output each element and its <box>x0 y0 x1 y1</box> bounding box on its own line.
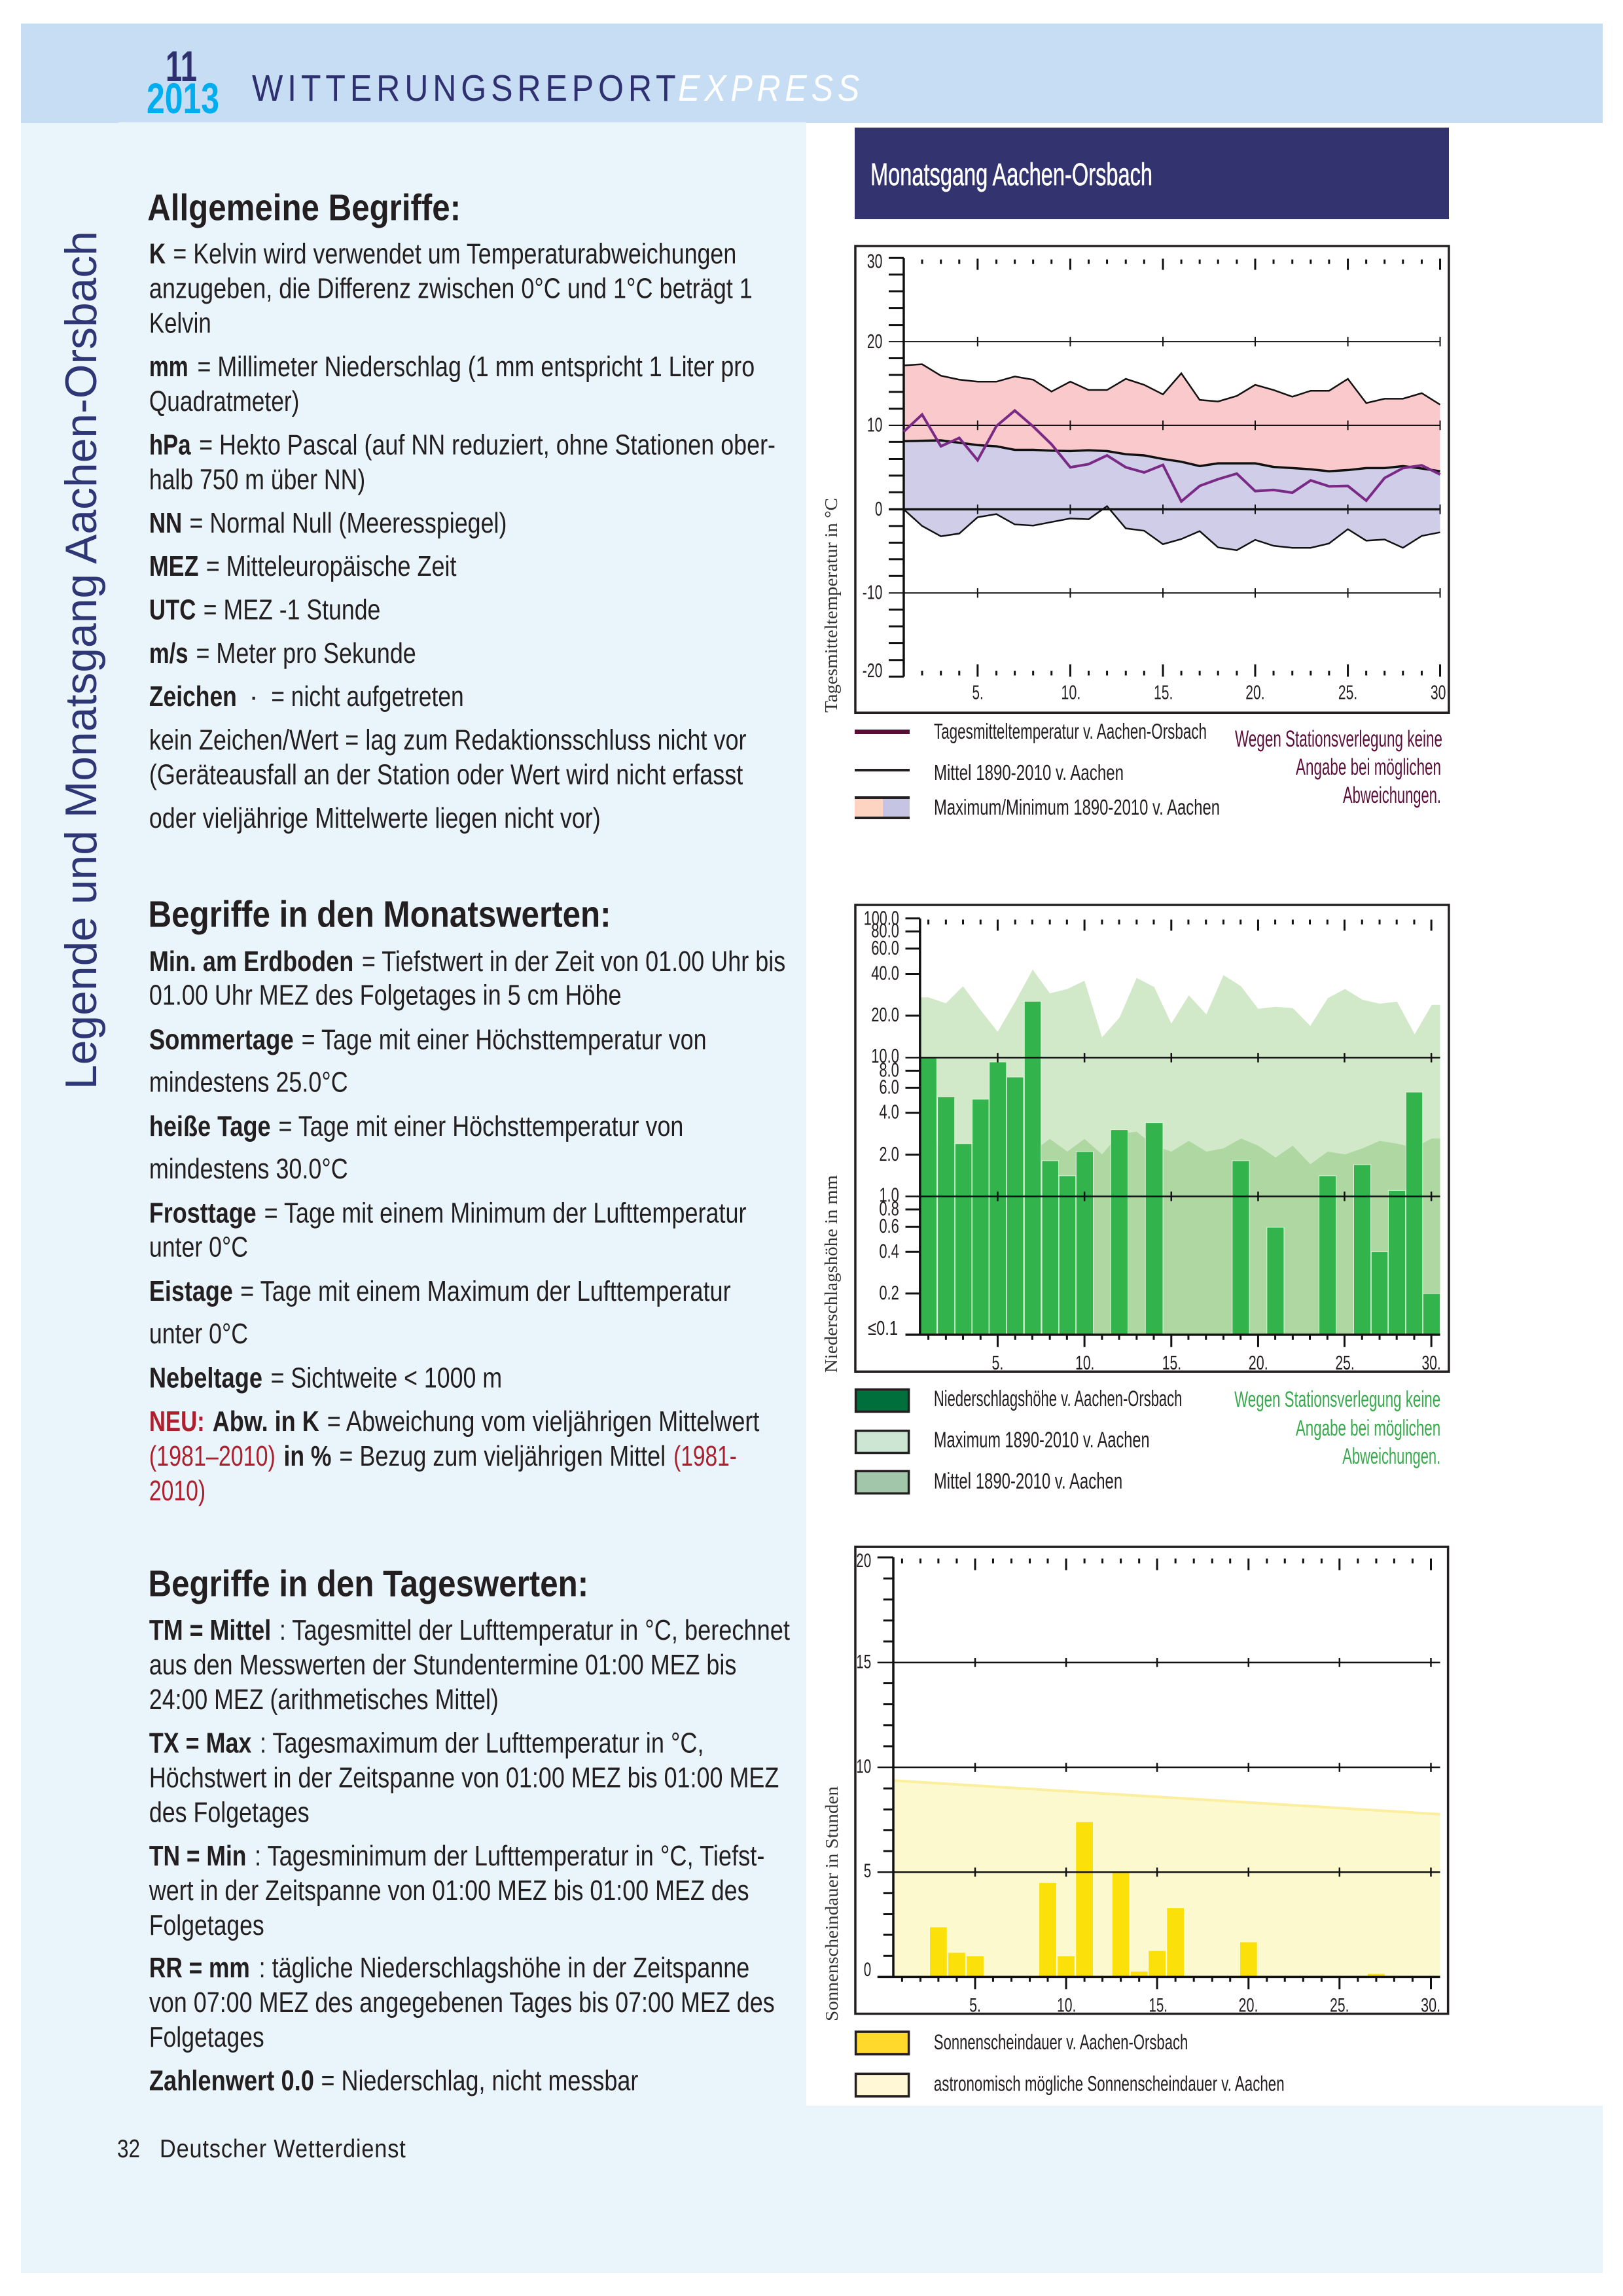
y axis labels: 0.4 <box>879 1240 899 1262</box>
legend item: astronomically possible: astronomisch mögliche Sonnenscheindauer v. Aachen <box>934 2072 1285 2096</box>
y axis labels: 0.8 <box>879 1197 899 1220</box>
legend item: max min swatch <box>855 795 1220 819</box>
definition: Nebeltage <box>149 1362 502 1394</box>
y axis labels: ≤0.1 <box>868 1317 898 1339</box>
definition: K: Kelvin <box>149 308 211 340</box>
definition: UTC <box>149 594 380 626</box>
definition: UTC: = MEZ -1 Stunde <box>204 594 380 626</box>
header title: WITTERUNGSREPORT <box>252 67 676 109</box>
legend item: maximum: Maximum 1890-2010 v. Aachen <box>934 1428 1150 1453</box>
header title <box>252 67 859 109</box>
grid lines <box>889 337 1440 598</box>
definition: hPa <box>149 429 776 496</box>
x axis labels: 20. <box>1245 681 1265 704</box>
definition: Zeichen <box>149 680 464 713</box>
x axis labels: 15. <box>1149 1994 1168 2016</box>
definition: MEZ <box>149 550 456 582</box>
definition: Zeichen: Zeichen <box>149 680 237 713</box>
definition: mm: = Millimeter Niederschlag (1 mm entspricht 1 Liter pro <box>197 351 755 383</box>
axis ticks <box>906 919 1431 1347</box>
x axis labels: 25. <box>1330 1994 1349 2016</box>
y axis labels: 100.0 <box>864 907 899 929</box>
axis ticks <box>889 258 1440 677</box>
definition: RR: von 07:00 MEZ des angegebenen Tages bis 07:00 MEZ des <box>149 1987 775 2019</box>
y axis labels: 10 <box>867 414 882 436</box>
line: minimum <box>904 506 1440 550</box>
legend item: sunshine duration <box>856 2031 1188 2055</box>
definition: TM: aus den Messwerten der Stundentermine 01:00 MEZ bis <box>149 1649 736 1681</box>
definition: kein Zeichen: oder vieljährige Mittelwerte liegen nicht vor) <box>149 802 601 834</box>
definition: NEU Abweichung: = Abweichung vom vieljährigen Mittelwert <box>327 1405 759 1438</box>
definition: hPa: = Hekto Pascal (auf NN reduziert, ohne Stationen ober- <box>199 429 776 461</box>
definition: Min. am Erdboden: = Tiefstwert in der Zeit von 01.00 Uhr bis <box>362 945 785 978</box>
definition: Sommertage: Sommertage <box>149 1023 294 1055</box>
grid lines <box>878 1658 1440 1877</box>
definition: NEU Abweichung: NEU: <box>149 1405 205 1438</box>
note: station relocation, green: Angabe bei möglichen <box>1296 1416 1440 1441</box>
definition: heiße Tage: heiße Tage <box>149 1110 271 1142</box>
legend item: precipitation: Niederschlagshöhe v. Aachen-Orsbach <box>934 1386 1182 1411</box>
definition: K: anzugeben, die Differenz zwischen 0°C und 1°C beträgt 1 <box>149 273 753 305</box>
y axis labels: 20 <box>856 1549 871 1572</box>
legend item: daily mean line: Tagesmitteltemperatur v. Aachen-Orsbach <box>934 719 1207 743</box>
legend item: astronomically possible <box>856 2072 1285 2096</box>
area mask below minimum <box>904 506 1440 587</box>
definition: Frosttage: unter 0°C <box>149 1231 248 1263</box>
axis ticks <box>878 1557 1431 1989</box>
issue number and year: 11 <box>166 42 197 90</box>
note: station relocation, green: Abweichungen. <box>1342 1444 1440 1469</box>
definition: Zahlenwert <box>149 2064 638 2096</box>
chart: precipitation <box>855 905 1449 1494</box>
x axis labels: 5. <box>969 1994 981 2016</box>
issue number and year: 2013 <box>147 74 219 122</box>
definition: Sommertage: mindestens 25.0°C <box>149 1066 348 1098</box>
definition: hPa: halb 750 m über NN) <box>149 464 365 496</box>
definition: heiße Tage: mindestens 30.0°C <box>149 1153 348 1185</box>
y axis labels: 0.2 <box>879 1282 899 1304</box>
definition: TN: TN = Min <box>149 1840 246 1872</box>
y axis labels: 20 <box>867 330 882 353</box>
definition: Min. am Erdboden: Min. am Erdboden <box>149 945 353 978</box>
heading: Begriffe in den Monatswerten: <box>149 893 611 934</box>
y axis labels <box>864 907 899 1339</box>
note: station relocation, purple: Angabe bei möglichen <box>1296 754 1441 780</box>
definition: TM: TM = Mittel <box>149 1614 271 1646</box>
definition: m/s: m/s <box>149 637 188 669</box>
definition: mm: Quadratmeter) <box>149 385 299 417</box>
definition: MEZ: MEZ <box>149 550 198 582</box>
x axis labels: 10. <box>1075 1352 1094 1374</box>
definition: Eistage: unter 0°C <box>149 1318 248 1350</box>
y axis labels: 15 <box>856 1650 871 1672</box>
x axis labels: 10. <box>1057 1994 1076 2016</box>
legend item: mean <box>856 1469 1122 1494</box>
definition: Zeichen: = nicht aufgetreten <box>271 680 464 713</box>
chart frame <box>855 1547 1448 2014</box>
definition: NEU Abweichung: (1981–2010) <box>149 1440 276 1472</box>
line: astronomically possible upper edge <box>893 1780 1440 1814</box>
area: minimum range <box>904 440 1440 567</box>
note: station relocation, purple: Abweichungen. <box>1343 783 1441 808</box>
definition: m/s <box>149 637 416 669</box>
chart: sunshine duration <box>855 1547 1448 2096</box>
definition: kein Zeichen: kein Zeichen/Wert = lag zum Redaktionsschluss nicht vor <box>149 724 747 756</box>
footer: page number and publisher: 32 <box>117 2135 140 2163</box>
y axis labels: 80.0 <box>871 919 899 942</box>
y axis labels: 1.0 <box>879 1184 899 1206</box>
definition: K <box>149 238 753 340</box>
issue number and year <box>147 42 219 122</box>
definition: NN: NN <box>149 507 182 539</box>
definition: NEU Abweichung: 2010) <box>149 1475 205 1507</box>
chart frame <box>855 246 1449 713</box>
panel title: Monatsgang Aachen-Orsbach <box>855 128 1449 219</box>
legend item: maximum <box>856 1428 1150 1453</box>
definition: TM <box>149 1614 790 1716</box>
y axis labels: 30 <box>867 250 882 272</box>
legend item: max min swatch: Maximum/Minimum 1890-2010 v. Aachen <box>934 795 1220 819</box>
y axis title: precipitation: Niederschlagshöhe in mm <box>821 1175 841 1373</box>
panel title: Monatsgang Aachen-Orsbach: Monatsgang Aachen-Orsbach <box>870 158 1152 192</box>
line: maximum <box>904 364 1440 404</box>
line: daily mean temperature Aachen-Orsbach <box>904 411 1440 501</box>
x axis labels: 15. <box>1154 681 1173 704</box>
definition: TN <box>149 1840 764 1941</box>
bars: precipitation Aachen-Orsbach <box>920 1001 1440 1334</box>
definition: Zahlenwert: Zahlenwert 0.0 <box>149 2064 314 2096</box>
definition: MEZ: = Mitteleuropäische Zeit <box>206 550 456 582</box>
definition: Min. am Erdboden <box>149 945 785 1012</box>
y axis title: sunshine: Sonnenscheindauer in Stunden <box>822 1786 842 2021</box>
y axis title: temperature: Tagesmitteltemperatur in °C <box>821 498 841 713</box>
legend item: precipitation <box>856 1386 1182 1411</box>
definition: RR: RR = mm <box>149 1952 250 1984</box>
definition: Eistage <box>149 1275 731 1350</box>
header title: EXPRESS <box>678 67 859 109</box>
axes <box>906 919 1440 1335</box>
x axis labels <box>972 681 1446 704</box>
y axis labels: 10 <box>856 1755 871 1777</box>
definition: Sommertage: = Tage mit einer Höchsttemperatur von <box>302 1023 707 1055</box>
legend item: mean line: Mittel 1890-2010 v. Aachen <box>934 760 1124 785</box>
area: maximum range <box>904 364 1440 567</box>
definition: Zahlenwert: = Niederschlag, nicht messbar <box>321 2064 638 2096</box>
definition: kein Zeichen <box>149 724 747 834</box>
x axis labels: 25. <box>1335 1352 1355 1374</box>
x axis labels: 20. <box>1249 1352 1268 1374</box>
y axis line <box>902 258 905 677</box>
definition: TN: : Tagesminimum der Lufttemperatur in °C, Tiefst- <box>255 1840 764 1872</box>
y axis labels: 8.0 <box>879 1059 899 1081</box>
x axis labels: 30. <box>1421 1352 1441 1374</box>
definition: NEU Abweichung: (1981- <box>673 1440 737 1472</box>
y axis labels: 40.0 <box>871 962 899 984</box>
zero line <box>889 508 1440 510</box>
x axis labels: 5. <box>992 1352 1003 1374</box>
definition: Frosttage: Frosttage <box>149 1197 257 1229</box>
vertical page title: Legende und Monatsgang Aachen-Orsbach <box>56 231 106 1089</box>
definition: Frosttage: = Tage mit einem Minimum der Lufttemperatur <box>264 1197 747 1229</box>
definition: K: = Kelvin wird verwendet um Temperaturabweichungen <box>173 238 736 270</box>
y axis labels: 20.0 <box>871 1004 899 1026</box>
definition: TX <box>149 1727 779 1829</box>
left text panel top edge <box>118 122 806 124</box>
y axis labels: -20 <box>863 659 882 682</box>
definition: NEU Abweichung: = Bezug zum vieljährigen Mittel <box>339 1440 666 1472</box>
section: Allgemeine Begriffe <box>147 186 776 834</box>
definition: TN: Folgetages <box>149 1909 264 1941</box>
y axis labels: 0 <box>864 1958 871 1981</box>
chart frame <box>855 905 1449 1371</box>
area: mean 1890-2010 <box>920 1132 1440 1335</box>
definition: TM: : Tagesmittel der Lufttemperatur in °C, berechnet <box>279 1614 790 1646</box>
header band <box>21 24 1603 123</box>
definition: TX: : Tagesmaximum der Lufttemperatur in °C, <box>260 1727 704 1759</box>
definition: RR: : tägliche Niederschlagshöhe in der Zeitspanne <box>259 1952 749 1984</box>
legend item: daily mean line <box>855 719 1207 743</box>
note: station relocation, green <box>1234 1387 1440 1469</box>
area: maximum 1890-2010 <box>920 970 1440 1335</box>
area: astronomically possible sunshine <box>893 1780 1440 1977</box>
x axis labels: 30. <box>1421 1994 1440 2016</box>
x axis labels: 20. <box>1238 1994 1258 2016</box>
legend: sunshine chart <box>856 2031 1285 2096</box>
definition: UTC: UTC <box>149 594 196 626</box>
definition: Nebeltage: = Sichtweite < 1000 m <box>271 1362 502 1394</box>
definition: RR <box>149 1952 775 2053</box>
definition: Frosttage <box>149 1197 747 1263</box>
definition: TM: 24:00 MEZ (arithmetisches Mittel) <box>149 1684 499 1716</box>
line: mean 1890-2010 <box>904 440 1440 471</box>
definition: mm: mm <box>149 351 188 383</box>
definition: heiße Tage <box>149 1110 683 1185</box>
y axis labels: 10.0 <box>871 1045 899 1067</box>
bars: sunshine duration Aachen-Orsbach <box>929 1822 1385 1977</box>
grid lines <box>906 1053 1440 1201</box>
definition: Eistage: = Tage mit einem Maximum der Lufttemperatur <box>240 1275 731 1307</box>
definition: TX: Höchstwert in der Zeitspanne von 01:00 MEZ bis 01:00 MEZ <box>149 1761 779 1793</box>
definition: NEU Abweichung: Abw. in K <box>213 1405 319 1438</box>
x axis labels: 15. <box>1162 1352 1181 1374</box>
y axis labels <box>856 1549 871 1981</box>
definition: hPa: hPa <box>149 429 191 461</box>
note: station relocation, purple <box>1235 726 1442 808</box>
legend item: mean line <box>855 760 1124 785</box>
legend: temperature chart <box>855 719 1442 819</box>
y axis labels: -10 <box>863 581 882 603</box>
x axis labels <box>992 1352 1441 1374</box>
definition: RR: Folgetages <box>149 2021 264 2053</box>
definition: NEU Abweichung: in % <box>283 1440 331 1472</box>
definition: Nebeltage: Nebeltage <box>149 1362 262 1394</box>
note: station relocation, purple: Wegen Stationsverlegung keine <box>1235 726 1442 752</box>
footer: page number and publisher: Deutscher Wetterdienst <box>160 2134 406 2163</box>
x axis labels: 5. <box>972 681 984 704</box>
definition: Sommertage <box>149 1023 707 1098</box>
definition: kein Zeichen: (Geräteausfall an der Station oder Wert wird nicht erfasst <box>149 759 743 791</box>
y axis labels: 0.6 <box>879 1215 899 1237</box>
definition: heiße Tage: = Tage mit einer Höchsttemperatur von <box>279 1110 683 1142</box>
x axis labels: 25. <box>1338 681 1357 704</box>
section: Begriffe in den Monatswerten <box>149 893 785 1507</box>
definition: NN: = Normal Null (Meeresspiegel) <box>190 507 507 539</box>
y axis labels: 2.0 <box>879 1143 899 1165</box>
definition: TN: wert in der Zeitspanne von 01:00 MEZ bis 01:00 MEZ des <box>149 1875 749 1907</box>
section: Begriffe in den Tageswerten <box>149 1563 790 2096</box>
definition: m/s: = Meter pro Sekunde <box>196 637 416 669</box>
definition: Eistage: Eistage <box>149 1275 233 1307</box>
heading: Allgemeine Begriffe: <box>147 186 461 228</box>
chart: daily mean temperature <box>855 246 1449 713</box>
x axis labels: 10. <box>1061 681 1080 704</box>
axes <box>878 1557 1440 1977</box>
note: station relocation, green: Wegen Stationsverlegung keine <box>1234 1387 1440 1412</box>
legend: precipitation chart <box>856 1386 1440 1494</box>
y axis labels: 6.0 <box>879 1076 899 1098</box>
y axis labels: 60.0 <box>871 937 899 959</box>
definition: mm <box>149 351 755 417</box>
legend item: mean: Mittel 1890-2010 v. Aachen <box>934 1469 1122 1494</box>
y axis labels: 0 <box>875 498 882 520</box>
definition: TX: des Folgetages <box>149 1797 310 1829</box>
definition: Min. am Erdboden: 01.00 Uhr MEZ des Folgetages in 5 cm Höhe <box>149 980 622 1012</box>
definition: K: K <box>149 238 166 270</box>
definition: Zeichen: · <box>249 680 259 713</box>
heading: Begriffe in den Tageswerten: <box>149 1563 588 1604</box>
legend item: sunshine duration: Sonnenscheindauer v. Aachen-Orsbach <box>934 2031 1188 2055</box>
definition: NEU Abweichung <box>149 1405 759 1507</box>
definition: TX: TX = Max <box>149 1727 252 1759</box>
y axis labels: 5 <box>864 1860 871 1882</box>
x axis labels <box>969 1994 1440 2016</box>
y axis labels <box>863 250 882 682</box>
y axis labels: 4.0 <box>879 1101 899 1123</box>
x axis labels: 30 <box>1431 681 1446 704</box>
